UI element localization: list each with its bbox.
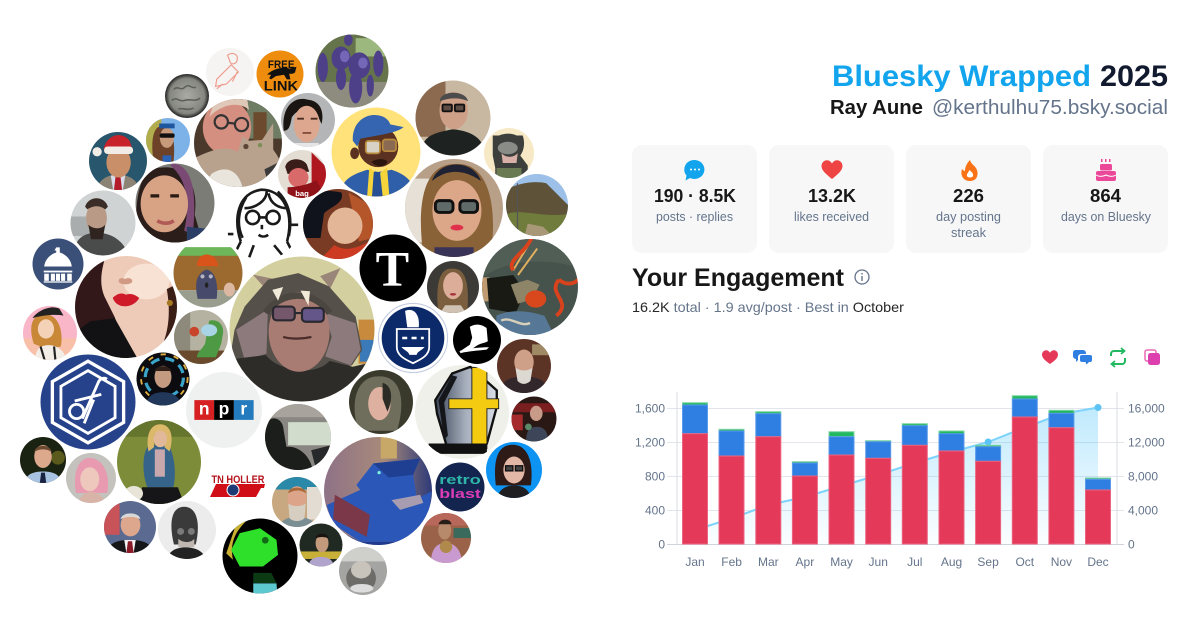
right axis labels: 12,000 [1128, 436, 1165, 450]
left axis labels: 400 [645, 504, 665, 518]
avatar: TN Holler logo: TN HOLLER [212, 474, 265, 486]
area: cumulative total [695, 408, 1098, 544]
avatar: wisteria [316, 34, 388, 108]
panel: likes received [769, 145, 894, 253]
panel: posts and replies: posts · replies [656, 209, 733, 224]
icon: chat bubble [684, 160, 704, 180]
left axis labels [635, 402, 665, 552]
panel: day posting streak: day posting [936, 209, 1001, 224]
icon: heart [821, 160, 843, 179]
avatar: free link panther: LINK [264, 78, 298, 93]
avatar: red line sketch [206, 48, 254, 96]
avatar: man with cat [194, 97, 283, 187]
icon: legend likes [1042, 350, 1058, 364]
chart: monthly engagement [635, 392, 1165, 569]
avatar: cartoon woman on blue [486, 442, 542, 498]
avatar: man with coconut [421, 513, 471, 563]
avatar: red lips [75, 256, 177, 358]
avatar: free link panther: FREE [268, 59, 295, 71]
avatar: TN Holler logo [210, 474, 265, 497]
user name and handle: @kerthulhu75.bsky.social [932, 97, 1168, 119]
avatar: red pinup with bag: bag [295, 189, 309, 198]
avatar: gray hair woman [349, 370, 413, 434]
avatar: NPR logo: n [199, 399, 210, 419]
avatar: cliff landscape [506, 174, 568, 236]
avatar: retro blast logo [436, 462, 484, 512]
avatar: man with spiral [136, 352, 190, 406]
month labels: Sep [977, 555, 999, 569]
icon: legend replies [1073, 350, 1092, 364]
month labels: Mar [758, 555, 779, 569]
panel: days on Bluesky [1043, 145, 1168, 253]
avatar: pink hair woman [66, 453, 116, 503]
avatar: NPR logo: r [240, 399, 247, 419]
panel: days on Bluesky: days on Bluesky [1061, 209, 1151, 224]
right axis labels [1128, 402, 1165, 552]
left axis labels: 1,600 [635, 402, 665, 416]
avatar: retro blast logo: blast [439, 486, 482, 501]
month labels: Feb [721, 555, 742, 569]
avatar: man at night [300, 524, 342, 566]
avatar: bear [484, 128, 534, 180]
icon: legend reposts [1111, 348, 1125, 367]
month labels: Dec [1087, 555, 1109, 569]
stacked bars [682, 396, 1110, 544]
panel: day posting streak: streak [951, 225, 986, 240]
avatar: woman selfie [427, 261, 479, 313]
legend icons [1042, 348, 1160, 367]
avatar: masked man b&w [158, 501, 216, 559]
avatar: NPR logo [186, 372, 262, 448]
month labels: Jan [685, 555, 705, 569]
avatar: man in blue shirt and tie [20, 437, 66, 483]
avatar: fence mask cartoon [174, 247, 242, 308]
user name and handle: Ray Aune [830, 97, 923, 119]
avatar: green frog [222, 518, 298, 594]
avatar: main profile in hood [230, 256, 374, 402]
month labels [685, 555, 1109, 569]
avatar: man in black shirt [416, 80, 490, 156]
avatar: sunglasses [146, 118, 190, 162]
panel: days on Bluesky: 864 [1090, 186, 1121, 206]
month labels: May [830, 555, 853, 569]
title: Bluesky Wrapped [832, 60, 1091, 93]
avatar: anchor shield seal [377, 302, 449, 374]
icon: info [855, 270, 869, 284]
avatar: man at red desk [512, 396, 556, 442]
avatar: NPR logo: p [219, 399, 229, 419]
user name and handle [830, 97, 1168, 119]
avatar: NYT logo [360, 234, 426, 302]
avatar: woman with patterned hood [136, 164, 214, 242]
avatar: line drawing with glasses [226, 186, 300, 260]
month labels: Nov [1051, 555, 1072, 569]
panel: day posting streak: 226 [953, 186, 984, 206]
avatar: flapper art [303, 189, 373, 259]
avatar: blue dragon reading [324, 437, 432, 545]
left axis labels: 1,200 [635, 436, 665, 450]
avatar: mitre with cross [415, 365, 509, 459]
avatar: woman with glasses [405, 159, 503, 257]
icon: flame [961, 160, 978, 181]
avatar: engraved portrait [281, 93, 335, 148]
line: cumulative total [695, 404, 1102, 530]
panel: day posting streak [906, 145, 1031, 253]
panel: likes received: 13.2K [808, 186, 856, 206]
avatar: bearded man gray [70, 190, 136, 256]
month labels: Jun [869, 555, 888, 569]
avatar: NYT logo: T [376, 240, 409, 296]
avatar: ship logo [453, 316, 501, 364]
avatar cloud [20, 34, 578, 595]
right axis labels: 0 [1128, 538, 1135, 552]
avatar: older bearded man [497, 339, 551, 393]
heading: your engagement: Your Engagement [632, 264, 845, 292]
right axis labels: 8,000 [1128, 470, 1158, 484]
left axis labels: 0 [658, 538, 665, 552]
icon: cake [1096, 159, 1116, 181]
avatar: car interior [265, 404, 331, 470]
avatar: comic woman with hat [23, 306, 77, 360]
panel: posts and replies [632, 145, 757, 253]
month labels: Apr [796, 555, 814, 569]
avatar: red pinup with bag [278, 150, 326, 198]
avatar: moon [165, 74, 209, 118]
month labels: Oct [1015, 555, 1035, 569]
avatar: pallas cat [339, 547, 387, 595]
avatar: capitol dome [32, 238, 84, 290]
avatar: retro blast logo: retro [439, 472, 481, 487]
avatar: free link panther [256, 50, 304, 98]
gridlines [667, 392, 1124, 544]
title: 2025 [1100, 60, 1168, 93]
panel: posts and replies: 190 · 8.5K [654, 186, 736, 206]
avatar: df hexagon logo [40, 354, 135, 450]
left axis labels: 800 [645, 470, 665, 484]
avatar: beach bearded man [272, 477, 322, 527]
avatar: kermit sipping tea [174, 310, 228, 364]
avatar: UVA cartoon [332, 108, 420, 196]
avatar: santa hat man [89, 132, 147, 193]
avatar: man with flag [104, 501, 156, 553]
engagement summary: 16.2K total · 1.9 avg/post · Best in October [632, 299, 904, 315]
right axis labels: 16,000 [1128, 402, 1165, 416]
avatar: japanese dragon [482, 237, 578, 335]
icon: legend quotes [1145, 350, 1160, 365]
month labels: Aug [941, 555, 962, 569]
month labels: Jul [907, 555, 922, 569]
avatar: blond woman in field [117, 420, 201, 504]
panel: likes received: likes received [794, 209, 869, 224]
right axis labels: 4,000 [1128, 504, 1158, 518]
